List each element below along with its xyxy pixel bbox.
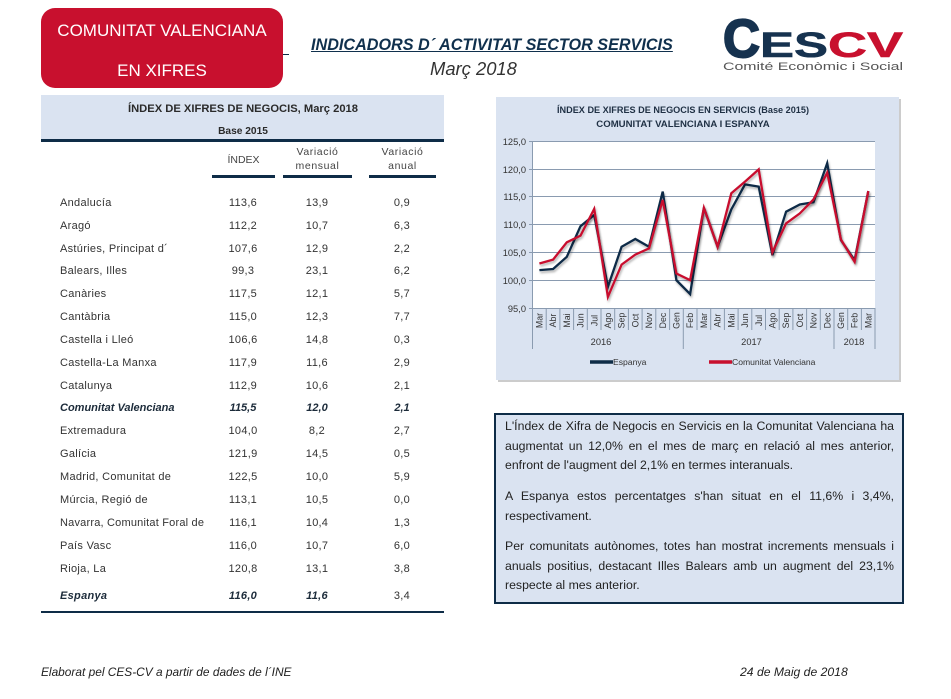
x axis month labels: Abr — [548, 314, 558, 327]
table bottom rule — [41, 611, 444, 613]
row: Múrcia: 0,0 — [394, 494, 410, 506]
row: Catalunya: 2,1 — [394, 380, 410, 392]
row: Aragó: 112,2 — [229, 220, 257, 232]
row: Cantàbria: 7,7 — [394, 311, 410, 323]
x axis month labels: Feb — [850, 313, 860, 328]
row: Castella-La Manxa — [60, 357, 410, 369]
chart title: ÍNDEX DE XIFRES DE NEGOCIS EN SERVICIS (Base 2015) — [557, 104, 809, 116]
row: Comunitat Valenciana (highlighted) — [60, 402, 410, 414]
footer source note: Elaborat pel CES-CV a partir de dades de l´INE — [41, 665, 292, 679]
row: Astúries: 12,9 — [306, 243, 328, 255]
row: Navarra — [60, 517, 410, 529]
row: Madrid — [60, 471, 410, 483]
row: Castella-La Manxa: 2,9 — [394, 357, 410, 369]
row: Astúries — [60, 243, 410, 255]
chart panel: line chart Comunitat Valenciana and Espanya — [496, 97, 901, 382]
row: Canàries — [60, 288, 410, 300]
row: Andalucía — [60, 197, 410, 209]
row: País Vasc: 116,0 — [229, 540, 257, 552]
header badge: Comunitat Valenciana en xifres — [41, 8, 283, 88]
row: Andalucía: 113,6 — [229, 197, 257, 209]
row: Andalucía: 0,9 — [394, 197, 410, 209]
table column headers: Variació — [382, 146, 423, 158]
row: Extremadura: 2,7 — [394, 425, 410, 437]
x axis month labels: Jul — [754, 315, 764, 326]
commentary text box: anuals positius, destacant Illes Balears amb un augment del 23,1% — [505, 559, 894, 573]
x axis month labels: Nov — [644, 312, 654, 328]
row: Astúries: Astúries, Principat d´ — [60, 243, 168, 255]
x axis month labels: Gen — [836, 312, 846, 329]
x axis month labels: Mar — [534, 313, 544, 328]
x axis year labels: 2016 — [591, 337, 611, 347]
y axis labels: 125,0 — [503, 137, 526, 147]
x axis month labels: Nov — [809, 312, 819, 328]
row: Balears: Balears, Illes — [60, 265, 127, 277]
row: Madrid: 122,5 — [228, 471, 258, 483]
x axis month labels: Oct — [795, 313, 805, 327]
table heading panel: Base 2015 — [218, 126, 268, 137]
row: Canàries: 12,1 — [306, 288, 328, 300]
x axis month labels: Jul — [589, 315, 599, 326]
row: País Vasc: 6,0 — [394, 540, 410, 552]
y axis labels: 120,0 — [503, 165, 526, 175]
data table rows — [60, 197, 410, 602]
legend: Espanya — [590, 357, 647, 367]
row: Astúries: 2,2 — [394, 243, 410, 255]
x axis month labels: Dec — [658, 312, 668, 328]
row: Múrcia: Múrcia, Regió de — [60, 494, 148, 506]
row: Balears: 6,2 — [394, 265, 410, 277]
x axis month labels: Gen — [672, 312, 682, 329]
row: Catalunya: 10,6 — [306, 380, 328, 392]
row: Castella-La Manxa: 117,9 — [229, 357, 257, 369]
x axis month labels: Mai — [562, 313, 572, 328]
y axis labels: 95,0 — [508, 304, 526, 314]
row: Comunitat Valenciana (highlighted): 115,5 — [230, 402, 256, 414]
logo: CES CV: CV — [828, 26, 904, 65]
row: Balears: 23,1 — [306, 265, 328, 277]
row: Castella i Lleó — [60, 334, 410, 346]
row: Múrcia — [60, 494, 410, 506]
row: Rioja: 13,1 — [306, 563, 328, 575]
row: Múrcia: 10,5 — [306, 494, 328, 506]
commentary text box: respectivament. — [505, 509, 592, 523]
y axis labels: 105,0 — [503, 248, 526, 258]
row: Catalunya: Catalunya — [60, 380, 112, 392]
x axis month labels: Mai — [726, 313, 736, 328]
chart title: COMUNITAT VALENCIANA I ESPANYA — [596, 119, 770, 130]
row: Aragó: Aragó — [60, 220, 91, 232]
row: Espanya (highlighted) — [60, 590, 410, 602]
row: Extremadura: 8,2 — [309, 425, 325, 437]
x axis month labels: Mar — [699, 313, 709, 328]
row: Cantàbria — [60, 311, 410, 323]
row: Comunitat Valenciana (highlighted): Comunitat Valenciana — [60, 402, 175, 414]
row: Balears: 99,3 — [232, 265, 254, 277]
table column headers — [212, 146, 436, 178]
row: Castella i Lleó: Castella i Lleó — [60, 334, 134, 346]
x axis month labels: Ago — [768, 313, 778, 328]
row: Castella-La Manxa: 11,6 — [306, 357, 328, 369]
row: Galícia: Galícia — [60, 448, 96, 460]
logo: CES CV: Comité Econòmic i Social — [723, 61, 903, 73]
row: Galícia: 0,5 — [394, 448, 410, 460]
row: Rioja: 120,8 — [228, 563, 258, 575]
row: Espanya (highlighted): 3,4 — [394, 590, 410, 602]
x axis month labels: Abr — [713, 314, 723, 327]
row: Andalucía: 13,9 — [306, 197, 328, 209]
legend: Espanya: Espanya — [613, 357, 647, 367]
row: Navarra: 1,3 — [394, 517, 410, 529]
row: Canàries: Canàries — [60, 288, 106, 300]
y axis labels: 110,0 — [503, 220, 526, 230]
row: Catalunya: 112,9 — [229, 380, 257, 392]
row: Extremadura — [60, 425, 410, 437]
row: Astúries: 107,6 — [228, 243, 258, 255]
row: Rioja: 3,8 — [394, 563, 410, 575]
row: Navarra: 116,1 — [229, 517, 257, 529]
row: País Vasc — [60, 540, 410, 552]
commentary text box — [494, 413, 904, 604]
x axis month labels: Ago — [603, 313, 613, 328]
row: Extremadura: 104,0 — [228, 425, 258, 437]
table column headers: anual — [388, 160, 417, 172]
row: Aragó: 10,7 — [306, 220, 328, 232]
x axis month labels: Jun — [576, 313, 586, 328]
series line: Comunitat Valenciana — [539, 169, 868, 297]
row: País Vasc: País Vasc — [60, 540, 111, 552]
legend: Comunitat Valenciana: Comunitat Valenciana — [732, 357, 816, 367]
logo: CES CV: ES — [760, 26, 828, 65]
row: Catalunya — [60, 380, 410, 392]
row: Castella i Lleó: 0,3 — [394, 334, 410, 346]
row: Navarra: 10,4 — [306, 517, 328, 529]
row: Cantàbria: Cantàbria — [60, 311, 110, 323]
x axis month labels: Oct — [630, 313, 640, 327]
y axis labels: 100,0 — [503, 276, 526, 286]
row: Extremadura: Extremadura — [60, 425, 126, 437]
row: Galícia: 14,5 — [306, 448, 328, 460]
x axis month labels: Feb — [685, 313, 695, 328]
row: Espanya (highlighted): 11,6 — [306, 590, 328, 602]
x axis month labels: Dec — [822, 312, 832, 328]
header badge: Comunitat Valenciana en xifres: COMUNITAT VALENCIANA — [57, 21, 267, 40]
row: Rioja: Rioja, La — [60, 563, 106, 575]
commentary text box: augmentat un 12,0% en el mes de març en relació al mes anterior, — [505, 439, 894, 453]
commentary text box: L'Índex de Xifra de Negocis en Servicis en la Comunitat Valenciana ha — [505, 419, 894, 433]
row: Espanya (highlighted): Espanya — [60, 590, 107, 602]
row: Espanya (highlighted): 116,0 — [229, 590, 257, 602]
row: Canàries: 5,7 — [394, 288, 410, 300]
series line: Espanya — [539, 163, 868, 294]
x axis year labels: 2017 — [741, 337, 762, 347]
x axis month labels: Jun — [740, 313, 750, 328]
row: Comunitat Valenciana (highlighted): 2,1 — [394, 402, 410, 414]
commentary text box: A Espanya estos percentatges s'han situat en el 11,6% i 3,4%, — [505, 489, 894, 503]
row: Rioja — [60, 563, 410, 575]
row: Castella i Lleó: 106,6 — [228, 334, 258, 346]
row: Cantàbria: 115,0 — [229, 311, 257, 323]
header badge: Comunitat Valenciana en xifres: EN XIFRES — [117, 61, 207, 80]
x axis month labels: Sep — [781, 313, 791, 328]
commentary text box: respecte al mes anterior. — [505, 578, 640, 592]
table heading panel: ÍNDEX DE XIFRES DE NEGOCIS, Març 2018 — [128, 103, 358, 115]
x axis year labels: 2018 — [844, 337, 864, 347]
commentary text box: Per comunitats autònomes, totes han mostrat increments mensuals i — [505, 539, 894, 553]
row: Madrid: 5,9 — [394, 471, 410, 483]
row: Comunitat Valenciana (highlighted): 12,0 — [306, 402, 328, 414]
row: Cantàbria: 12,3 — [306, 311, 328, 323]
row: Galícia: 121,9 — [228, 448, 258, 460]
x axis year labels — [591, 337, 864, 347]
commentary text box: enfront de l'augment del 2,1% en termes interanuals. — [505, 458, 793, 472]
table column headers: ÍNDEX — [227, 154, 260, 166]
row: Madrid: Madrid, Comunitat de — [60, 471, 171, 483]
table top rule — [41, 139, 444, 142]
row: Castella-La Manxa: Castella-La Manxa — [60, 357, 157, 369]
chart title — [557, 104, 809, 130]
x axis month labels: Mar — [863, 313, 873, 328]
y axis labels: 115,0 — [503, 192, 526, 202]
row: Balears — [60, 265, 410, 277]
row: Múrcia: 113,1 — [229, 494, 257, 506]
x axis month labels — [534, 312, 873, 329]
footer date: 24 de Maig de 2018 — [740, 665, 848, 679]
row: Navarra: Navarra, Comunitat Foral de — [60, 517, 204, 529]
x axis month labels: Sep — [617, 313, 627, 328]
table column headers: mensual — [296, 160, 339, 172]
decorative underline tail beside badge — [283, 54, 289, 55]
row: Madrid: 10,0 — [306, 471, 328, 483]
row: Aragó — [60, 220, 410, 232]
row: Galícia — [60, 448, 410, 460]
row: Aragó: 6,3 — [394, 220, 410, 232]
table heading panel — [41, 95, 444, 139]
logo: CES CV — [723, 15, 904, 73]
row: Andalucía: Andalucía — [60, 197, 112, 209]
table column headers: Variació — [297, 146, 338, 158]
row: Castella i Lleó: 14,8 — [306, 334, 328, 346]
main title: INDICADORS D´ ACTIVITAT SECTOR SERVICIS — [311, 36, 673, 54]
row: Canàries: 117,5 — [229, 288, 257, 300]
y axis labels — [503, 137, 526, 314]
row: País Vasc: 10,7 — [306, 540, 328, 552]
subtitle: month: Març 2018 — [430, 58, 517, 79]
